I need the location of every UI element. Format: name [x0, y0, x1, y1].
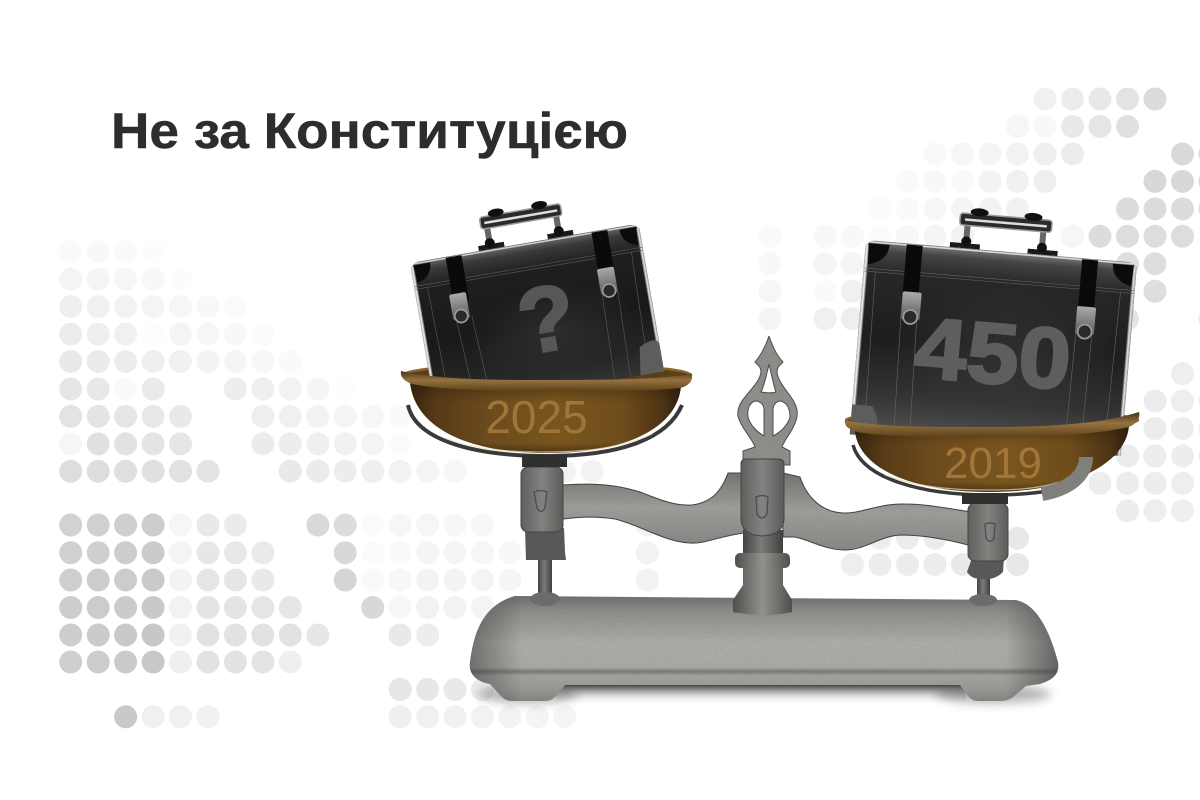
case body: [410, 224, 664, 411]
straps: [903, 244, 1098, 311]
right beam arm: [783, 473, 972, 550]
right suitcase: [850, 199, 1140, 457]
left hanger block: [521, 467, 563, 532]
scale base shadow: [478, 685, 1051, 705]
left column of scale: [525, 528, 566, 606]
base of scale: [470, 596, 1058, 701]
left brass pan: [401, 371, 692, 456]
straps: [446, 230, 615, 302]
under-arc bracket: [408, 405, 682, 456]
right hanger block: [968, 503, 1008, 561]
case body: [850, 240, 1137, 457]
dot map pattern, right: [758, 88, 1200, 576]
year 2019: 2019: [944, 439, 1042, 488]
bowl: [410, 382, 681, 453]
corners: [867, 243, 1134, 286]
figure 450: 450: [911, 300, 1075, 408]
left suitcase: [403, 185, 664, 411]
rim: [845, 412, 1139, 437]
question mark: ?: [510, 265, 583, 375]
rim: [401, 371, 692, 391]
left beam arm: [563, 473, 744, 543]
centre spire finial: [738, 336, 797, 465]
dot map pattern, left: [59, 240, 659, 728]
buckles: [900, 291, 1096, 339]
buckles: [449, 266, 619, 324]
year 2025: 2025: [485, 391, 588, 443]
centre block: [741, 459, 784, 536]
handle: [472, 196, 574, 251]
left pan cap: [522, 455, 567, 467]
corners: [413, 227, 639, 283]
right pan cap: [962, 493, 1008, 504]
left pan back rim: [403, 364, 691, 386]
bowl: [855, 425, 1129, 492]
wheel corner: [850, 404, 880, 437]
centre pillar: [733, 530, 792, 615]
right column of scale: [967, 558, 1004, 606]
right brass pan: [845, 412, 1139, 495]
title: Не за Конституцією: [111, 103, 628, 159]
metal hook: [1042, 457, 1086, 494]
under-arc bracket: [853, 445, 1080, 495]
wheel corner: [635, 339, 664, 375]
right pan back rim: [846, 411, 1138, 429]
scale: cast iron stand and beam: [470, 336, 1058, 701]
handle: [950, 206, 1061, 256]
